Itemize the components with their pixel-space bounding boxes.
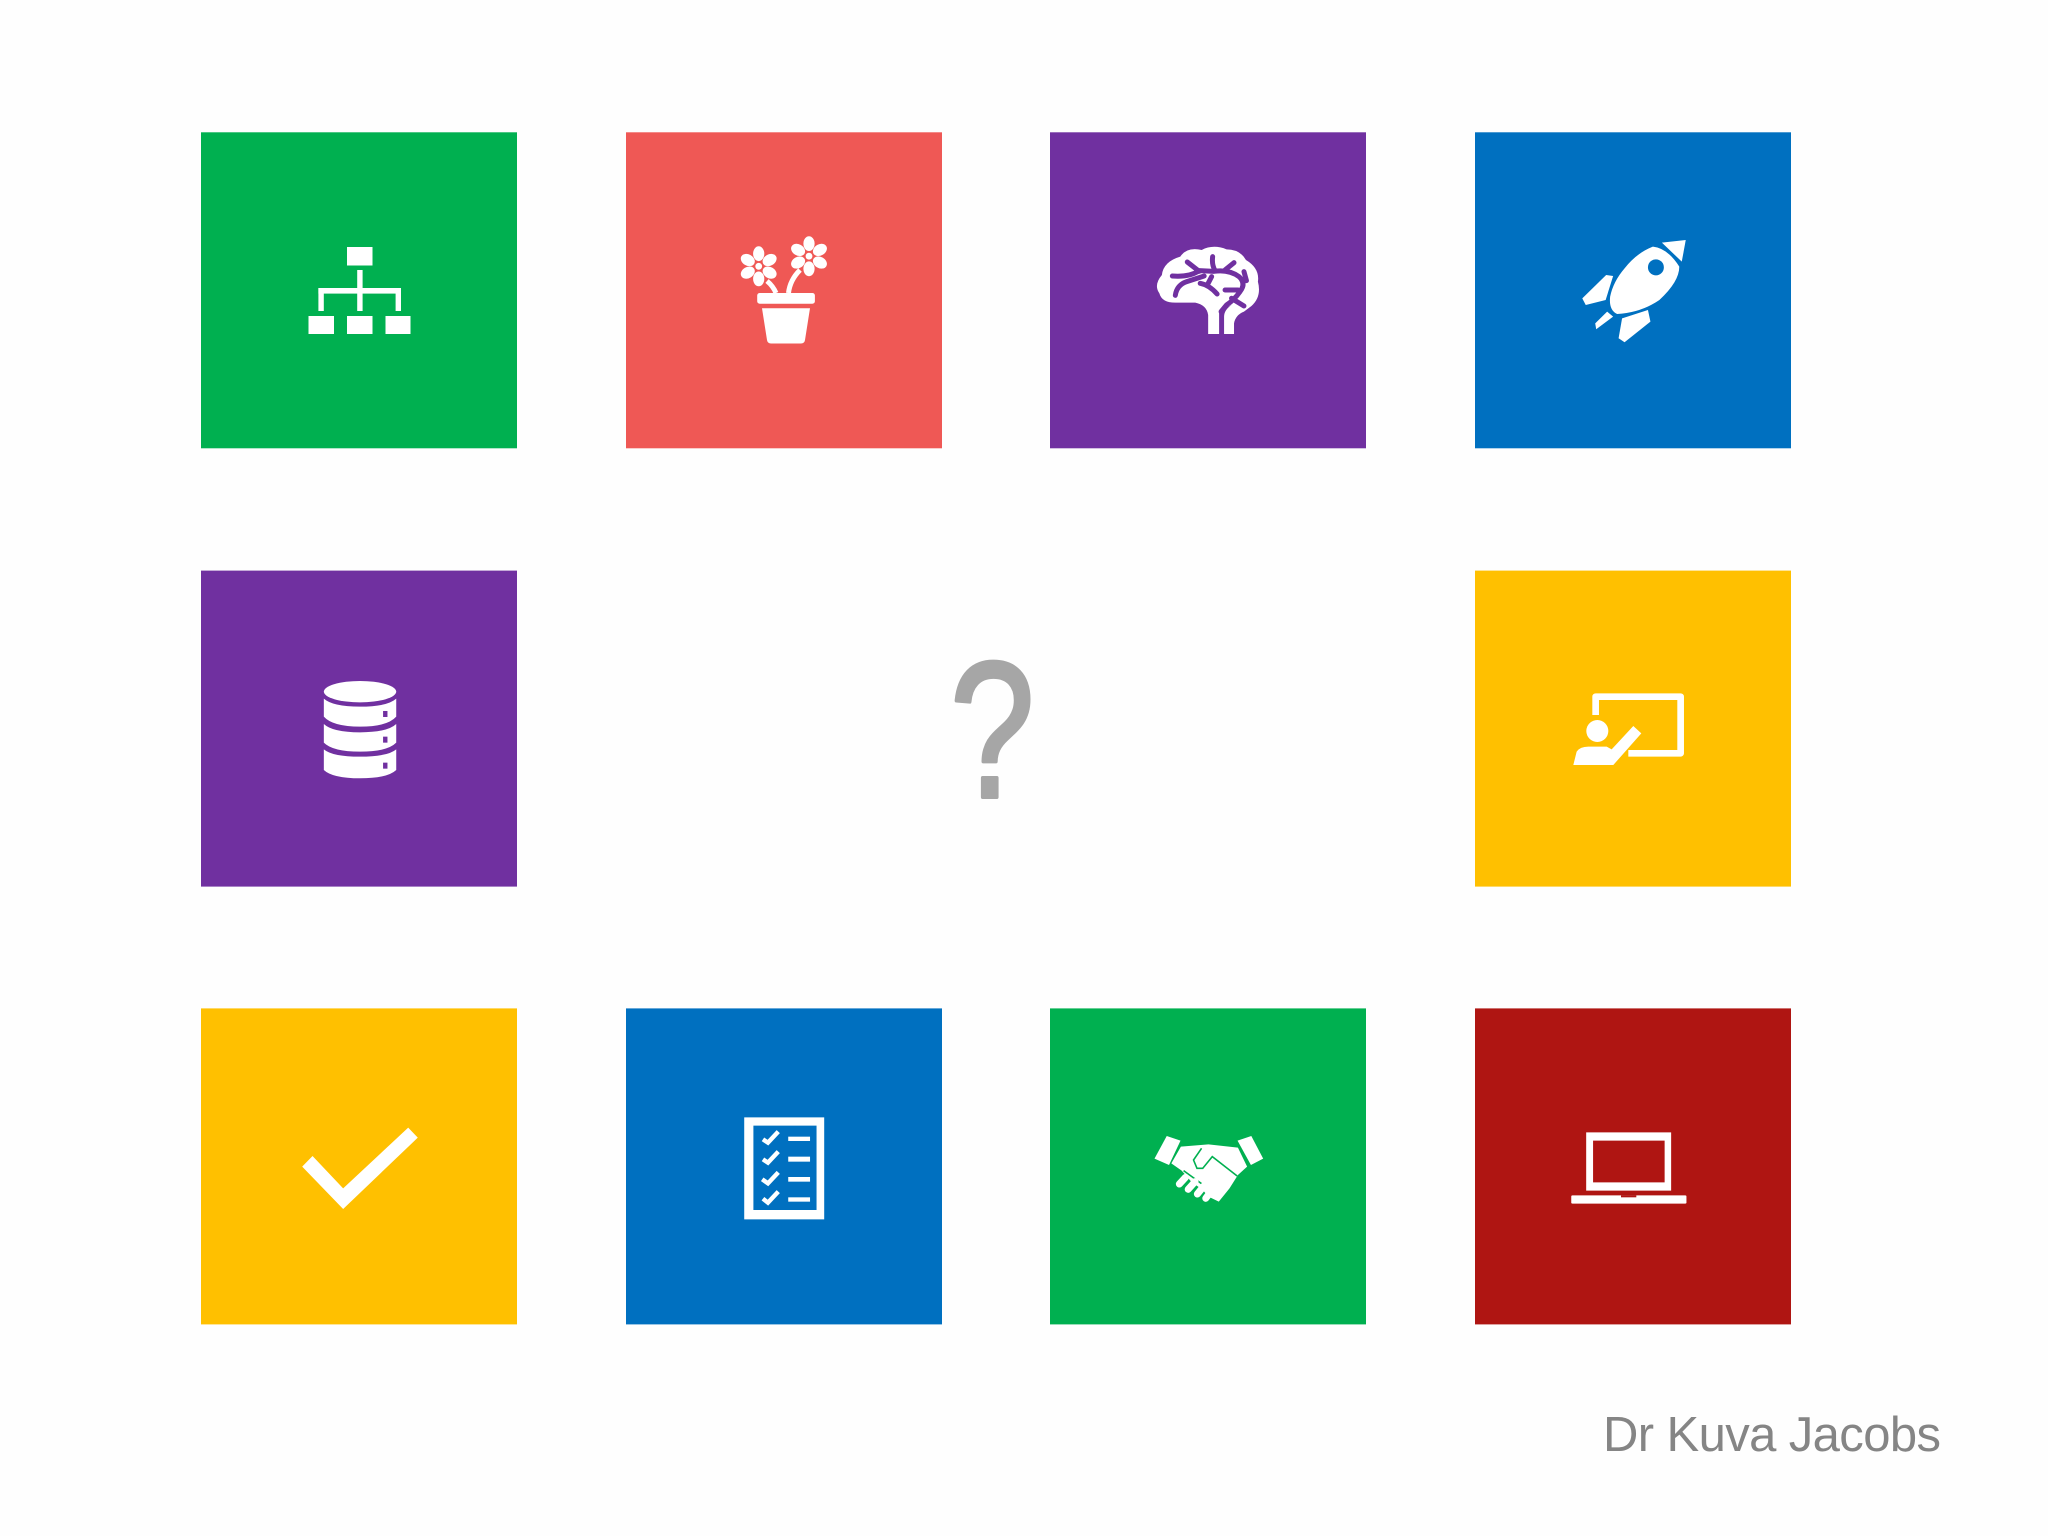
icon: check mark bbox=[302, 1128, 418, 1209]
question mark: ? bbox=[950, 621, 1035, 838]
panel: laptop tile bbox=[1475, 1008, 1791, 1324]
icon: flower pot bbox=[739, 236, 829, 344]
author credit: Dr Kuva Jacobs bbox=[1603, 1408, 1941, 1462]
icon: laptop bbox=[1571, 1132, 1686, 1204]
icon: organisation chart bbox=[308, 247, 410, 334]
panel: check mark tile bbox=[201, 1008, 517, 1324]
icon: brain bbox=[1157, 247, 1259, 334]
panel: database tile bbox=[201, 571, 517, 887]
panel: hierarchy tile bbox=[201, 132, 517, 448]
panel: brain tile bbox=[1050, 132, 1366, 448]
panel: handshake tile bbox=[1050, 1008, 1366, 1324]
icon: checklist bbox=[744, 1117, 824, 1219]
icon: database bbox=[324, 681, 396, 778]
panel: plant tile bbox=[626, 132, 942, 448]
icon: rocket bbox=[1582, 240, 1686, 342]
panel: rocket tile bbox=[1475, 132, 1791, 448]
panel: checklist tile bbox=[626, 1008, 942, 1324]
icon: handshake bbox=[1154, 1136, 1263, 1202]
icon: presenter at board bbox=[1573, 697, 1681, 765]
panel: presenter tile bbox=[1475, 571, 1791, 887]
